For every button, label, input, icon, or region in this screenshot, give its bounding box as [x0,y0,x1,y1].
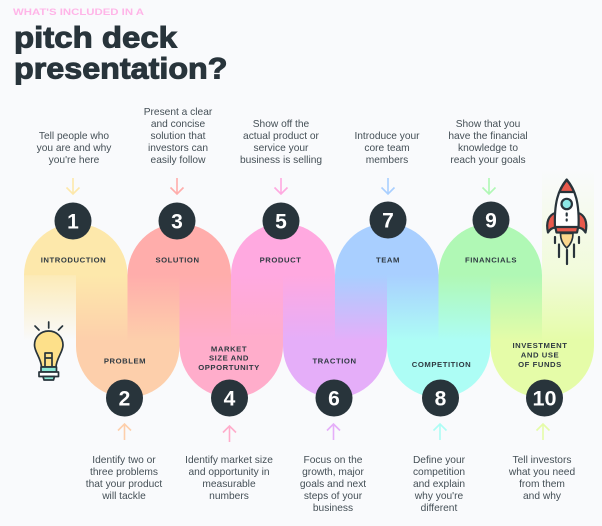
arch: product [231,223,335,275]
step 10: investment and use of funds [508,341,575,502]
strips between arches [76,170,594,341]
label: SOLUTION [155,256,200,264]
description: Present a clear [144,107,213,118]
description: Show that you [456,119,520,130]
arrow [482,178,496,194]
description: service your [254,143,309,154]
winding ribbon [24,170,594,398]
number: 9 [485,210,497,232]
description: goals and next [300,479,366,490]
label: COMPETITION [412,360,471,369]
step 7: team [354,131,420,264]
label: AND USE [521,350,559,360]
title: presentation? [14,52,228,85]
number: 2 [119,388,130,410]
number: 7 [382,210,394,232]
description: why you're [414,491,464,502]
arrow [274,178,288,194]
label: MARKET [211,344,247,354]
badge [316,380,352,416]
arch: competition [387,340,490,398]
arch: traction [283,340,387,398]
arrow [223,426,236,442]
description: numbers [209,491,249,502]
arch: financials [438,223,542,275]
description: Identify two or [92,455,156,466]
number: 8 [435,388,447,410]
label: TRACTION [312,356,357,366]
step 9: financials [448,119,528,264]
arrow [66,178,80,194]
description: what you need [508,467,575,478]
number: 1 [67,210,79,234]
step 4: market size and opportunity [185,344,273,502]
number: 6 [328,388,340,410]
arch: solution [128,223,231,275]
description: measurable [202,479,256,490]
badge [472,202,510,238]
arrow [382,178,394,194]
arch: investment [490,340,594,398]
label: FINANCIALS [465,256,517,264]
description: you are and why [37,143,112,154]
badge [262,202,300,240]
arch: market size [180,340,283,398]
description: solution that [151,131,206,142]
label: INVESTMENT [512,341,568,350]
badge [54,202,92,240]
description: and opportunity in [188,467,270,478]
number: 4 [224,388,236,410]
description: core team [364,143,410,154]
title [14,22,228,85]
arrow [170,178,184,194]
label: PROBLEM [104,356,146,366]
description: members [366,155,408,166]
step 2: problem [86,356,162,502]
description: three problems [90,467,158,478]
arrow [434,424,446,440]
number: 3 [171,210,183,234]
arrow [327,424,340,440]
description: that your product [86,479,162,490]
number: 10 [532,388,556,410]
description: Show off the [253,119,310,130]
label: SIZE AND [209,354,249,362]
description: Define your [413,455,466,466]
title: pitch deck [14,22,177,54]
label: OF FUNDS [518,360,562,369]
label: INTRODUCTION [41,256,106,264]
step 5: product [240,119,322,264]
eyebrow heading: WHAT'S INCLUDED IN A [13,7,144,18]
description: and explain [413,479,465,490]
description: from them [519,479,565,490]
arch: introduction [24,223,128,275]
badge [211,380,248,416]
description: different [421,503,457,514]
label: TEAM [376,256,400,264]
arch: team [335,223,438,275]
arch: problem [76,340,180,398]
badge [106,380,143,416]
description: business [313,503,353,514]
badge [422,380,459,416]
step 8: competition [412,360,471,514]
description: you're here [49,155,100,166]
description: have the financial [448,131,528,142]
strip: start fade [24,275,76,341]
badge [158,202,196,240]
description: Introduce your [354,131,420,142]
description: knowledge to [458,143,518,154]
description: and concise [151,119,206,130]
badge [526,380,563,416]
arrow [536,424,550,440]
description: business is selling [240,155,322,166]
description: steps of your [304,491,363,502]
step 3: solution [144,107,213,264]
arrow [118,424,131,440]
description: easily follow [151,155,206,166]
description: Tell investors [513,455,571,466]
icon: rocket [547,180,586,264]
description: Identify market size [185,455,273,466]
description: competition [413,467,465,478]
label: OPPORTUNITY [198,363,260,372]
description: Focus on the [304,455,363,466]
step 6: traction [300,356,366,514]
step 1: introduction [37,131,112,264]
description: and why [523,491,562,502]
badge [370,202,406,238]
description: will tackle [101,491,146,502]
description: growth, major [302,467,364,478]
description: investors can [148,143,208,154]
label: PRODUCT [260,256,301,264]
number: 5 [275,210,287,234]
icon: light bulb [34,322,63,380]
description: Tell people who [39,131,109,142]
description: actual product or [243,131,320,142]
description: reach your goals [450,155,526,166]
